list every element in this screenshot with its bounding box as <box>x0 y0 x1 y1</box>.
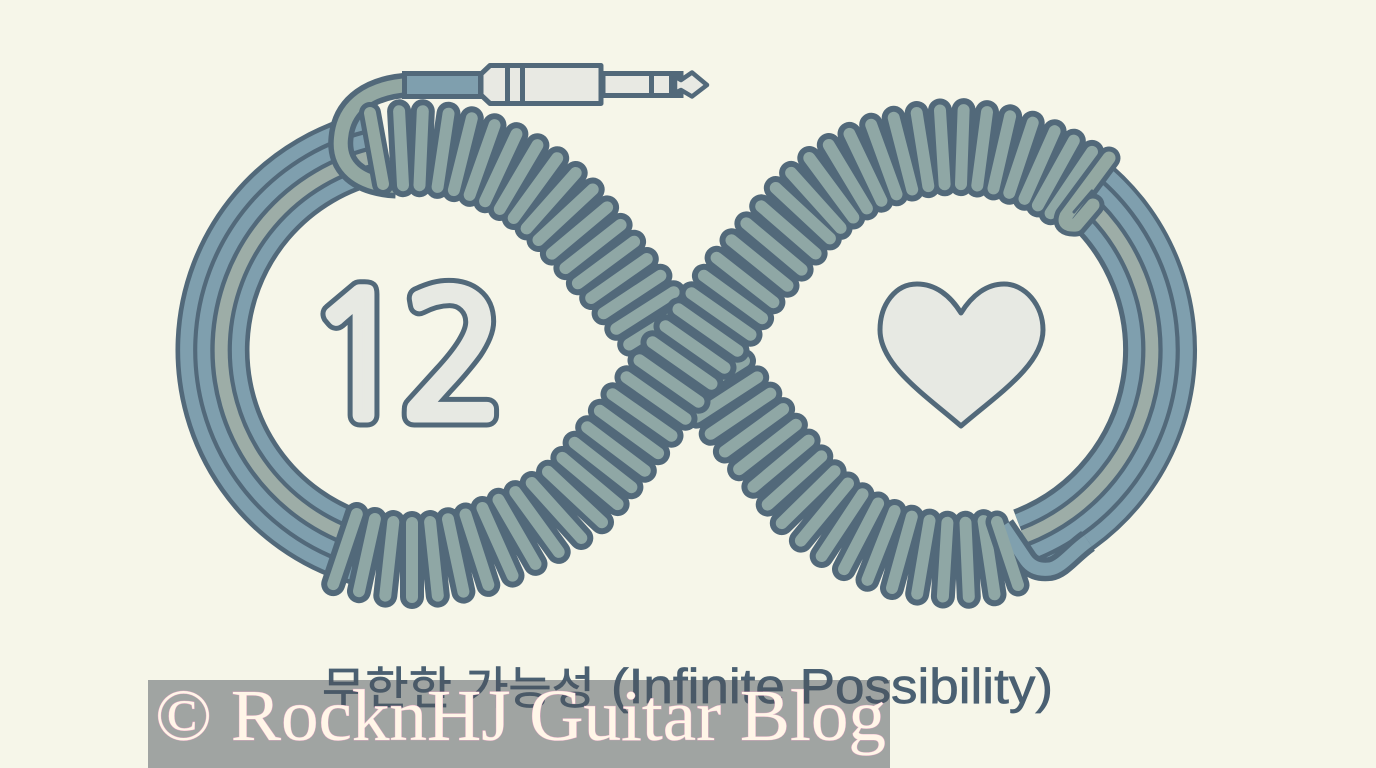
cable loop from plug into the coil <box>341 85 410 186</box>
number 12 <box>306 270 505 442</box>
coiled cable strand passing underneath <box>399 111 995 597</box>
left plain cable ring <box>187 122 382 573</box>
watermark text: © RocknHJ Guitar Blog <box>155 675 886 756</box>
plug shaft <box>603 74 681 96</box>
caption <box>322 652 1053 717</box>
handle rings <box>508 66 522 103</box>
right plain cable ring <box>1017 165 1186 569</box>
plug tip <box>675 72 707 96</box>
plug strain relief sleeve <box>404 74 480 96</box>
first coil turn at the top left <box>370 113 383 184</box>
coil hook at the top right <box>1065 158 1109 225</box>
plug handle <box>481 66 601 104</box>
watermark band <box>148 680 890 768</box>
coiled cable strand passing on top <box>333 110 1092 597</box>
caption: (Infinite Possibility) <box>611 660 1053 714</box>
jack plug <box>404 66 707 104</box>
heart icon <box>880 284 1043 426</box>
shaft divider <box>652 74 672 95</box>
caption: 무한한 가능성 <box>322 652 595 717</box>
coil hook at the bottom right <box>997 522 1088 585</box>
